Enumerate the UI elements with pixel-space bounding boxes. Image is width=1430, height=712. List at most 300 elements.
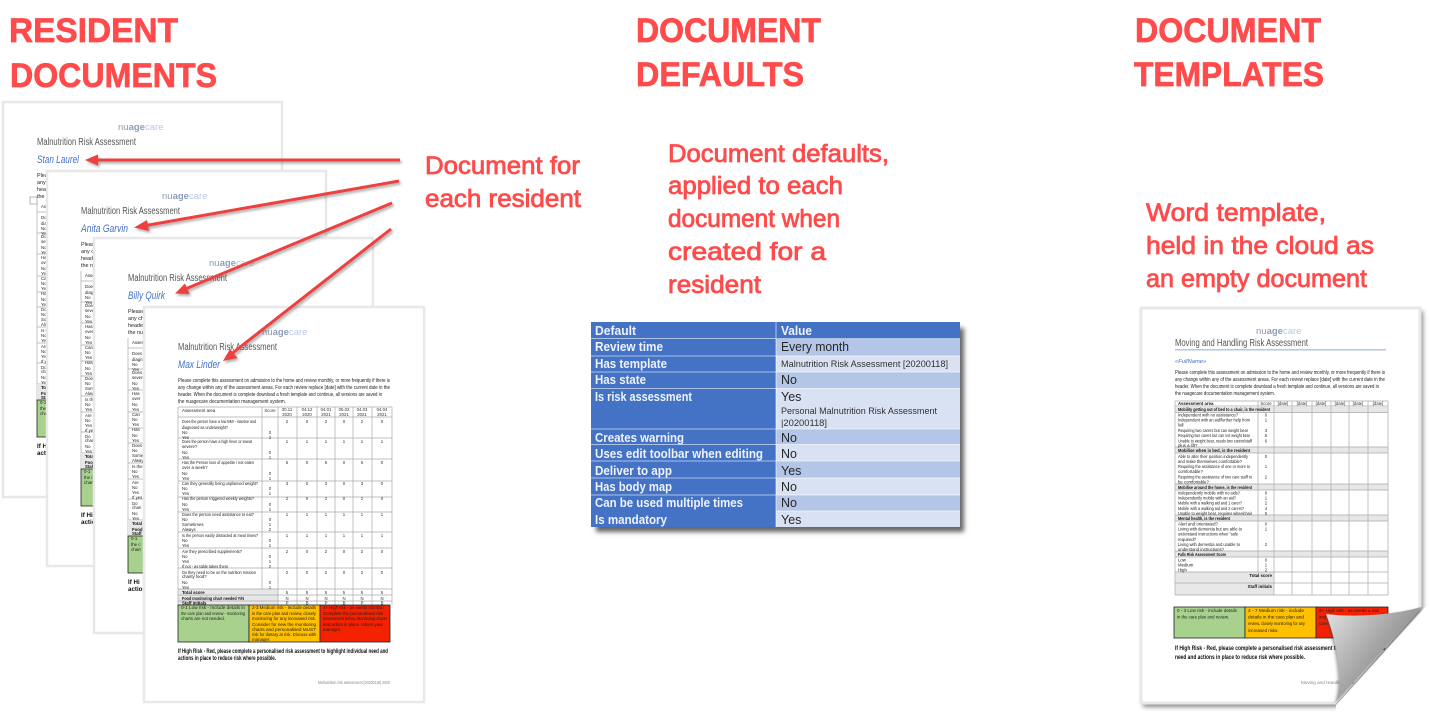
table rows: Creates warning: [595, 431, 684, 445]
template text and table: comfortable?: [1178, 469, 1203, 474]
document page: Anita Garvin: No: [85, 418, 91, 423]
document page: Max Linder: 1: [269, 491, 272, 496]
template text and table: care: [1319, 621, 1328, 626]
document page: Max Linder: N: [324, 596, 328, 601]
document page: Stan Laurel: Stan Laurel: [37, 154, 79, 166]
template text and table: 0: [1265, 522, 1268, 526]
template text and table: 0: [1265, 490, 1268, 496]
table rows: No: [781, 447, 797, 461]
template text and table: 0: [1265, 454, 1268, 459]
template text and table: Requiring the assistance of one or more to: [1178, 464, 1251, 469]
document page: Billy Quirk: Assess: [132, 340, 146, 345]
document page: Max Linder: Yes: [182, 435, 189, 440]
document page: Max Linder: Does the person have a high fever or sweat: [182, 439, 253, 444]
document page: Stan Laurel: the c: [40, 406, 50, 411]
document page: Max Linder: Does the person have a low BMI - inactive and: [182, 419, 257, 424]
template text and table: 2: [1265, 568, 1268, 572]
document page: Anita Garvin: diagn: [85, 290, 96, 295]
document page: Max Linder: 1: [325, 512, 328, 517]
document page: Max Linder: 1: [306, 512, 309, 517]
document page: Max Linder: 0: [343, 481, 346, 486]
document page: Max Linder: manager.: [323, 627, 341, 632]
table rows: No: [781, 496, 797, 510]
document page: Max Linder: 1: [381, 439, 384, 444]
document page: Max Linder: No: [182, 580, 188, 585]
template text and table: Mental health, is the resident: [1178, 516, 1230, 521]
template text and table: Assessment area: [1178, 401, 1214, 406]
template text and table: details in the care plan and: [1248, 614, 1305, 620]
document page: Stan Laurel: No: [41, 245, 47, 250]
document page: Anita Garvin: Assess: [85, 273, 99, 278]
template text and table: 8+ High risk - as needs a risk: [1319, 608, 1380, 613]
arrow: Billy Quirk: [175, 203, 392, 294]
template text and table: Independently mobile with an aid?: [1178, 496, 1237, 500]
document page: Max Linder: charts and personalised MUST: [252, 627, 316, 632]
document page: Anita Garvin: Anita Garvin: [80, 223, 128, 235]
document page: Max Linder: No: [182, 554, 188, 559]
template text and table: 0 - 3 Low risk - include details: [1177, 608, 1238, 613]
document page: Max Linder: 5: [306, 590, 309, 595]
document page: Anita Garvin: 0-1: [84, 469, 91, 474]
document page: Anita Garvin: No: [85, 381, 91, 386]
table header: Value: [781, 324, 812, 338]
document page: Stan Laurel: Yes: [41, 302, 48, 307]
document page: Max Linder: 1: [269, 476, 272, 481]
template text and table: Living with dementia and unable to: [1178, 542, 1241, 547]
callout: document defaults description: [668, 140, 889, 299]
document page: Max Linder: 0: [381, 481, 384, 486]
document page: Max Linder: manager.: [252, 637, 270, 642]
document page: Max Linder: N: [380, 596, 384, 601]
table header: [595, 324, 812, 338]
document page: Max Linder: 2020: [282, 412, 292, 417]
document page: Max Linder: No: [182, 450, 188, 455]
table rows: Yes: [781, 464, 801, 478]
document page: Max Linder: No: [182, 471, 188, 476]
template text and table: 2: [1265, 542, 1268, 547]
document page: Max Linder: 0: [269, 430, 272, 435]
template text and table: understand instructions when "safe: [1178, 532, 1239, 536]
template text and table: 4 - 7 Medium risk - include: [1248, 608, 1305, 613]
document page: Max Linder: Malnutrition risk assessment [20200118] 2020: [318, 680, 390, 685]
document page: Anita Garvin: If yes: [85, 428, 95, 433]
document page: Stan Laurel: Staff: [41, 395, 51, 400]
table rows: Has state: [595, 373, 646, 387]
document page: Max Linder: 0: [269, 486, 272, 491]
document page: Max Linder: Food monitoring chart needed Y/N: [182, 596, 244, 601]
document page: Stan Laurel: Alway: [41, 322, 53, 327]
template text and table: Mobile with a walking aid and 2 carers?: [1178, 506, 1245, 511]
document page: Billy Quirk: No: [132, 511, 138, 516]
document page: Anita Garvin: No: [85, 350, 91, 355]
document page: Anita Garvin: chari: [85, 438, 94, 443]
template text and table: need and actions in place to reduce risk where possible.: [1175, 654, 1305, 661]
callout: word template description: Word template,: [1146, 199, 1326, 227]
document page: Max Linder: monitoring for any increased risk.: [252, 616, 316, 621]
document page: Max Linder: 2: [286, 549, 289, 554]
table rows: Uses edit toolbar when editing: [595, 447, 763, 461]
document page: Anita Garvin: Yes: [85, 355, 92, 360]
document page: Billy Quirk: Billy Quirk: [128, 290, 165, 302]
table rows: Has template: [595, 357, 667, 371]
document page: Max Linder: No: [182, 486, 188, 491]
document page: Max Linder: No: [182, 502, 188, 507]
template text and table: 1: [1265, 496, 1268, 500]
callout: document for each resident: Document for: [425, 152, 580, 180]
document page: Max Linder: 0: [306, 549, 309, 554]
document page: Anita Garvin: Yes: [85, 340, 92, 345]
document page: Max Linder: Does the person need assistance to eat?: [182, 512, 255, 517]
document page: Max Linder: 1: [325, 533, 328, 538]
document page: Max Linder: If High Risk - Red, please complete a personalised risk assessment to highlight individual need and: [178, 648, 388, 655]
document page: Billy Quirk: No: [132, 448, 138, 453]
document page: Max Linder: 1: [269, 507, 272, 512]
document page: Billy Quirk: 0-1: [131, 536, 138, 541]
document page: Stan Laurel: Has: [41, 255, 49, 260]
document page: Max Linder: [144, 307, 424, 702]
document page: Max Linder: Malnutrition Risk Assessment: [178, 342, 277, 353]
document page: Max Linder: 5: [325, 590, 328, 595]
document page: Anita Garvin: If Hi: [81, 512, 93, 519]
document page: Max Linder: 2: [286, 570, 289, 575]
document page: Max Linder: 0: [381, 419, 384, 424]
document page: Billy Quirk: Yes: [132, 407, 139, 412]
document page: Max Linder: 2021: [377, 412, 387, 417]
table rows: Is mandatory: [595, 513, 667, 527]
document page: Stan Laurel: No: [41, 266, 47, 271]
document page: Max Linder: 2: [361, 419, 364, 424]
icon: page curl: [1326, 607, 1422, 702]
document page: Anita Garvin: Yes: [85, 423, 92, 428]
document page: Max Linder: Max Linder: [178, 359, 221, 371]
document page: Max Linder: Yes: [182, 476, 189, 481]
template text and table: 2: [1265, 474, 1268, 480]
document page: Billy Quirk: Yes: [132, 490, 139, 495]
document page: Max Linder: the nuagecare documentation management system.: [178, 399, 286, 405]
document page: Billy Quirk: Some: [132, 453, 144, 458]
document page: Max Linder: risk for dietary at risk. Discuss with: [252, 632, 317, 637]
document page: Max Linder: Yes: [182, 543, 189, 548]
document page: Stan Laurel: No: [41, 226, 47, 231]
document page: Max Linder: 5: [361, 460, 364, 465]
template text and table: Staff initials: [1248, 584, 1273, 589]
document page: Billy Quirk: Does: [132, 370, 142, 375]
document page: Max Linder: 5: [325, 460, 328, 465]
document page: Stan Laurel: Yes: [41, 231, 48, 236]
table rows: [595, 340, 948, 527]
document page: Anita Garvin: Has: [85, 324, 93, 329]
document page: Stan Laurel: the nu: [37, 194, 52, 200]
document page: Max Linder: 0: [343, 570, 346, 575]
document page: Anita Garvin: Staff: [85, 464, 95, 469]
template text and table: understand instructions?: [1178, 547, 1225, 552]
document page: Max Linder: 2: [325, 549, 328, 554]
heading: document defaults: [636, 12, 821, 94]
document page: Stan Laurel: Has: [41, 291, 49, 296]
document page: Anita Garvin: severe: [85, 308, 99, 313]
document page: Max Linder: nuagecare: [262, 327, 307, 338]
template text and table: and: [1319, 614, 1327, 620]
document page: Anita Garvin: header: [81, 256, 98, 262]
template text and table: [date]: [1278, 401, 1288, 406]
document page: Max Linder: 2: [361, 570, 364, 575]
table rows: No: [781, 373, 797, 387]
document page: Max Linder: over a week?: [182, 465, 208, 470]
arrow: Stan Laurel: [85, 154, 400, 166]
document page: Stan Laurel: Yes: [41, 271, 48, 276]
document page: Stan Laurel: Yes: [41, 286, 48, 291]
document page: Billy Quirk: If Hi: [128, 579, 140, 586]
document page: Max Linder: 1: [361, 439, 364, 444]
document page: Max Linder: 30.11: [282, 407, 293, 412]
document page: Max Linder: No: [182, 430, 188, 435]
template text and table: Total score: [1249, 573, 1273, 578]
document page: Max Linder: 04.03: [357, 407, 368, 412]
document page: Max Linder: 0: [343, 419, 346, 424]
document page: Stan Laurel: If yes: [41, 359, 51, 364]
document page: Max Linder: the care plan and review - monitoring: [181, 611, 245, 616]
document page: Max Linder: 0: [343, 549, 346, 554]
document page: Stan Laurel: header: [37, 187, 54, 193]
template text and table: Low: [1178, 558, 1187, 562]
template text and table: 1: [1265, 418, 1268, 422]
document page: Anita Garvin: Yes: [85, 371, 92, 376]
heading: resident documents: DOCUMENTS: [10, 57, 217, 95]
document page: Max Linder: 2021: [339, 412, 349, 417]
document page: Stan Laurel: Yes: [41, 354, 48, 359]
document page: Max Linder: 1: [343, 512, 346, 517]
document page: Billy Quirk: Is the: [132, 464, 143, 469]
template text and table: 6: [1265, 438, 1268, 444]
document page: Max Linder: No: [182, 538, 188, 543]
document page: Billy Quirk: No: [132, 381, 138, 386]
table rows: |20200118]: [781, 418, 827, 428]
document page: Max Linder: Yes: [182, 585, 189, 590]
document page: Max Linder: 2: [325, 570, 328, 575]
document page: Anita Garvin: [47, 171, 326, 566]
document page: Anita Garvin: Do: [85, 434, 91, 439]
document page: Max Linder: B: [306, 600, 309, 606]
document page: Anita Garvin: Alway: [85, 391, 97, 396]
template text and table: [date]: [1297, 401, 1307, 406]
arrow: Anita Garvin: [134, 181, 399, 231]
document page: Max Linder: Yes: [182, 559, 189, 564]
document page: Stan Laurel: No: [41, 333, 47, 338]
callout: document for each resident: each resident: [425, 185, 581, 213]
document page: Max Linder: 1: [343, 439, 346, 444]
document page: Stan Laurel: action: [37, 450, 55, 457]
document page: Anita Garvin: Malnutrition Risk Assessment: [81, 206, 180, 217]
document page: Billy Quirk: Has: [132, 427, 140, 432]
document page: Max Linder: 0: [269, 517, 272, 522]
document page: Stan Laurel: over: [41, 260, 50, 265]
document page: Max Linder: 1: [286, 512, 289, 517]
document page: Stan Laurel: Are: [41, 344, 48, 349]
callout: document defaults description: document when: [668, 205, 840, 233]
template text and table: Independently mobile with no aids?: [1178, 490, 1241, 496]
template text and table: Moving and Handling Risk Assessment: [1175, 338, 1308, 349]
document page: Max Linder: 2021: [357, 412, 367, 417]
document page: Billy Quirk: Does: [132, 443, 142, 448]
document page: Max Linder: charts are not needed.: [181, 616, 225, 621]
document page: Max Linder: 5: [381, 590, 384, 595]
document page: Billy Quirk: chari: [132, 505, 141, 510]
template text and table: «FullName»: [1175, 359, 1206, 365]
template text and table: be comfortable?: [1178, 480, 1209, 484]
document page: Billy Quirk: Please: [128, 309, 144, 315]
document page: Stan Laurel: Some: [41, 317, 53, 322]
document page: Max Linder: Yes: [182, 491, 189, 496]
callout: document for each resident: [425, 152, 581, 213]
document page: Max Linder: Has the person triggered weekly weights?: [182, 496, 255, 501]
document page: Max Linder: 2: [361, 549, 364, 554]
heading: document templates: DOCUMENT: [1135, 12, 1321, 50]
table rows: Yes: [781, 513, 801, 527]
template text and table: Alert and orientated?: [1178, 522, 1219, 526]
document page: Max Linder: 0: [269, 538, 272, 543]
document page: Billy Quirk: Do: [132, 501, 138, 506]
document page: Stan Laurel: Food: [41, 391, 52, 396]
document page: Anita Garvin: any change: [81, 249, 109, 255]
document page: Max Linder: 3: [325, 481, 328, 486]
document page: Max Linder: actions in place to reduce risk where possible.: [178, 655, 276, 662]
document page: Anita Garvin: Yes: [85, 407, 92, 412]
template text and table: 5: [1265, 433, 1268, 438]
document page: Stan Laurel: If Hi: [37, 443, 49, 450]
document page: Max Linder: 2: [361, 496, 364, 501]
heading: resident documents: RESIDENT: [9, 12, 178, 50]
template text and table: Independent with no assistance?: [1178, 412, 1239, 418]
document page: Max Linder: N: [285, 596, 289, 601]
document page: Anita Garvin: Food: [85, 460, 96, 465]
document page: Max Linder: charity food?: [182, 574, 207, 579]
document page: Max Linder: 0: [269, 580, 272, 585]
callout: document defaults description: resident: [668, 271, 761, 299]
document page: Billy Quirk: Total: [132, 521, 142, 526]
document page: Anita Garvin: Is the: [85, 397, 96, 402]
document page: Max Linder: 0: [269, 502, 272, 507]
document page: Billy Quirk: No: [132, 362, 138, 367]
document page: Billy Quirk: No: [132, 469, 138, 474]
document page: Max Linder: 1: [381, 533, 384, 538]
template text and table: Please complete this assessment on admission to the home and review monthly, or more frequently if there is: [1175, 370, 1385, 376]
document page: Stan Laurel: nuagecare: [118, 122, 163, 133]
document page: Max Linder: B: [381, 600, 384, 606]
document page: Billy Quirk: Yes: [132, 422, 139, 427]
template text and table: Medium: [1178, 562, 1194, 568]
document page: Max Linder: Sometimes: [182, 522, 204, 527]
template text and table: Independent with an aid/further help from: [1178, 418, 1250, 422]
template text and table: 0: [1265, 558, 1268, 562]
document page: Max Linder: 0: [381, 549, 384, 554]
document page: Max Linder: 1: [343, 533, 346, 538]
document page: Anita Garvin: No: [85, 402, 91, 407]
document page: Max Linder: 5: [286, 590, 289, 595]
document page: Anita Garvin: Yes: [85, 300, 92, 305]
document page: Billy Quirk: Alway: [132, 458, 144, 463]
table rows: Malnutrition Risk Assessment [20200118]: [781, 359, 948, 369]
document page: Max Linder: assessment below. Monitoring charts: [323, 616, 388, 621]
document page: Stan Laurel: Does: [41, 215, 51, 220]
document page: Max Linder: Yes: [182, 455, 189, 460]
document page: Anita Garvin: Total: [85, 454, 95, 459]
document page: Max Linder: 1: [306, 533, 309, 538]
document page: Billy Quirk: Yes: [132, 516, 139, 521]
template text and table: [date]: [1373, 401, 1383, 406]
document page: Stan Laurel: Is the: [41, 328, 52, 333]
document page: Max Linder: 1: [361, 533, 364, 538]
document page: Max Linder: Assessment area: [182, 408, 216, 413]
document page: Max Linder: Complete the personalised risk: [323, 611, 384, 616]
document page: Max Linder: Always: [182, 527, 196, 532]
document page: Max Linder: 0: [306, 570, 309, 575]
document page: Billy Quirk: If yes: [132, 495, 142, 500]
document page: Stan Laurel: No: [41, 349, 47, 354]
document page: Max Linder: 1: [269, 522, 272, 527]
document page: Billy Quirk: header: [128, 323, 145, 329]
document page: Stan Laurel: Malnutrition Risk Assessment: [37, 137, 136, 148]
template text and table: Falls Risk Assessment Score: [1178, 552, 1226, 557]
document page: Max Linder: 5: [343, 590, 346, 595]
document page: Stan Laurel: Yes: [41, 380, 48, 385]
document page: Max Linder: Do they need to be on the nutrition mission: [182, 570, 257, 575]
template text and table: Score: [1260, 401, 1272, 406]
callout: document defaults description: applied to each: [668, 172, 843, 200]
document page: Billy Quirk: Are: [132, 480, 139, 485]
document page: Max Linder: P: [286, 600, 289, 606]
document page: Max Linder: Yes: [182, 507, 189, 512]
document page: Max Linder: 3: [361, 481, 364, 486]
table rows: No: [781, 431, 797, 445]
template text and table: [date]: [1353, 401, 1363, 406]
document page: Anita Garvin: chart: [84, 480, 95, 485]
document page: Billy Quirk: Staff: [132, 531, 142, 536]
document page: Anita Garvin: Has: [85, 360, 93, 365]
document page: Stan Laurel: Please: [37, 173, 53, 179]
document page: Billy Quirk: [94, 238, 373, 633]
template text and table: High: [1178, 568, 1187, 572]
document page: Billy Quirk: Yes: [132, 438, 139, 443]
document page: Max Linder: Consider for new the monitoring: [252, 622, 317, 627]
template text and table: [1174, 326, 1388, 685]
document page: Stan Laurel: 0-1: [40, 400, 47, 405]
document page: Stan Laurel: Do: [41, 365, 47, 370]
document page: Max Linder: Is the person easily distracted at meal times?: [182, 533, 259, 538]
document page: Anita Garvin: over: [85, 329, 94, 334]
table rows: Yes: [781, 390, 801, 404]
document page: Billy Quirk: Yes: [132, 386, 139, 391]
template text and table: fall: [1178, 422, 1184, 428]
template text and table: the nuagecare documentation management system.: [1175, 391, 1275, 397]
template text and table: Able to alter their position independently: [1178, 454, 1249, 459]
document page: Max Linder: Can they generally being unplanned weight?: [182, 481, 259, 486]
template text and table: Mobilise when in bed, is the resident: [1178, 448, 1251, 453]
table rows: Personal Malnutrition Risk Assessment: [781, 406, 938, 416]
document page: Stan Laurel: diagn: [41, 221, 52, 226]
document page: Max Linder: 1: [286, 439, 289, 444]
document page: Max Linder: 0: [306, 419, 309, 424]
document page: Stan Laurel: Does: [41, 234, 51, 239]
document page: Stan Laurel: Yes: [41, 338, 48, 343]
document page: Max Linder: N: [360, 596, 364, 601]
document page: Max Linder: in the care plan and review, closely: [252, 611, 317, 616]
document page: Anita Garvin: No: [85, 295, 91, 300]
document page: Billy Quirk: Yes: [132, 474, 139, 479]
document page: Max Linder: Please complete this assessment on admission to the home and review monthly, or more frequently if there is: [178, 378, 390, 384]
document page: Anita Garvin: No: [85, 366, 91, 371]
table rows: Can be used multiple times: [595, 496, 743, 510]
heading: resident documents: [9, 12, 217, 95]
